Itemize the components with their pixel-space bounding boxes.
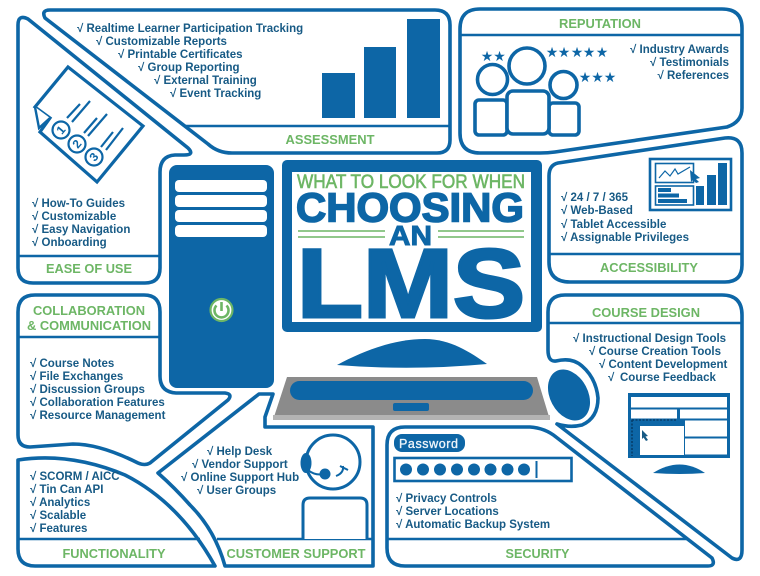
icon: group of people with star ratings: ★ [579,69,591,85]
functionality feature list: √ SCORM / AICC [30,470,120,483]
reputation feature list: √ References [657,69,729,82]
panel: reputation [460,9,742,153]
security feature list: √ Server Locations [396,505,499,518]
ease of use feature list: √ Easy Navigation [32,223,130,236]
collaboration feature list: √ Discussion Groups [30,383,145,396]
bar chart icon [322,19,440,118]
title line: choosing: CHOOSING [296,184,524,230]
collaboration feature list [30,357,166,422]
functionality feature list: √ Features [30,522,87,535]
functionality feature list: √ Analytics [30,496,90,509]
customer support feature list: √ User Groups [197,484,276,497]
green title rules [298,231,524,237]
customer support feature list [181,445,299,497]
reputation feature list: √ Testimonials [650,56,729,69]
title line: what to look for when: WHAT TO LOOK FOR WHEN [297,171,525,193]
computer tower [169,165,274,388]
collaboration feature list: √ Resource Management [30,409,166,422]
ease of use heading: EASE OF USE [46,261,132,276]
assessment feature list: √ Event Tracking [170,87,261,100]
icon: group of people with star ratings: ★ [493,48,506,64]
monitor stand [337,339,487,368]
icon: numbered checklist document [35,67,143,182]
ease of use feature list: √ Customizable [32,210,116,223]
collaboration heading: & COMMUNICATION [27,318,151,333]
functionality feature list [30,470,120,535]
password label [394,434,465,452]
accessibility feature list: √ Assignable Privileges [561,231,689,244]
course design feature list: Course Feedback [620,372,716,384]
collaboration heading [27,303,151,333]
accessibility feature list: √ Web-Based [561,204,633,217]
security heading: SECURITY [506,546,570,561]
icon: numbered checklist document: 2 [69,137,85,151]
reputation feature list: √ Industry Awards [630,43,729,56]
functionality feature list: √ Scalable [30,509,86,522]
accessibility feature list: √ Tablet Accessible [561,218,666,231]
customer support heading: CUSTOMER SUPPORT [226,546,366,561]
keyboard [273,377,550,420]
assessment feature list: √ External Training [154,74,257,87]
panel: collaboration and communication [18,295,230,464]
icon: numbered checklist document: 1 [53,123,69,137]
assessment feature list: √ Printable Certificates [118,48,243,61]
icon: group of people with star ratings: ★ [481,48,493,64]
collaboration feature list: √ File Exchanges [30,370,123,383]
course design feature list: √ Course Creation Tools [589,345,721,358]
monitor with title [282,160,542,338]
collaboration heading: COLLABORATION [33,303,145,318]
icon: numbered checklist document: 3 [86,150,102,164]
icon: group of people with star ratings: ★ [583,44,595,60]
panel: accessibility [549,138,742,282]
reputation feature list [630,43,729,82]
title line: an: AN [389,220,432,251]
mouse [540,362,598,428]
icon: group of people with star ratings: ★ [546,44,558,60]
icon: agent with headset [300,435,367,539]
assessment feature list: √ Group Reporting [138,61,240,74]
course design feature list: √ Content Development [599,358,728,371]
reputation heading: REPUTATION [559,16,641,31]
functionality heading: FUNCTIONALITY [62,546,166,561]
collaboration feature list: √ Collaboration Features [30,396,165,409]
ease of use feature list: √ Onboarding [32,236,107,249]
icon: group of people with star ratings: ★ [558,44,570,60]
course design feature list: √ Instructional Design Tools [573,332,726,345]
icon: analytics dashboard [650,159,731,210]
title line: lms: LMS [297,229,525,338]
icon: group of people with star ratings: ★ [591,69,604,85]
security feature list: √ Privacy Controls [396,492,497,505]
course design feature list: √ [608,372,614,384]
panel: course design [548,295,742,559]
icon: group of people with star ratings: ★ [596,44,608,60]
collaboration feature list: √ Course Notes [30,357,114,370]
functionality feature list: √ Tin Can API [30,483,103,496]
assessment feature list: √ Realtime Learner Participation Tracking [77,22,303,35]
accessibility feature list [561,191,689,244]
accessibility feature list: √ 24 / 7 / 365 [561,191,629,204]
panel: assessment [44,10,450,153]
password label: Password [399,437,458,451]
customer support feature list: √ Online Support Hub [181,471,299,484]
ease of use feature list: √ How-To Guides [32,197,125,210]
assessment heading: ASSESSMENT [286,132,375,147]
icon: authoring tool screen [628,393,730,474]
icon: group of people with star ratings [475,44,616,135]
panel: ease of use [18,17,191,283]
password input field [394,458,572,481]
icon: power button [210,299,232,321]
security feature list [396,492,550,531]
assessment feature list: √ Customizable Reports [96,35,227,48]
customer support feature list: √ Help Desk [207,445,273,458]
panel: functionality [18,458,215,566]
course design feature list [573,332,728,384]
customer support feature list: √ Vendor Support [192,458,288,471]
panel: security [387,427,713,566]
panel: customer support [158,394,373,566]
course design heading: COURSE DESIGN [592,305,700,320]
accessibility heading: ACCESSIBILITY [600,260,698,275]
assessment feature list [77,22,303,100]
icon: group of people with star ratings: ★ [571,44,583,60]
icon: group of people with star ratings: ★ [604,69,616,85]
ease of use feature list [32,197,130,249]
security feature list: √ Automatic Backup System [396,518,550,531]
